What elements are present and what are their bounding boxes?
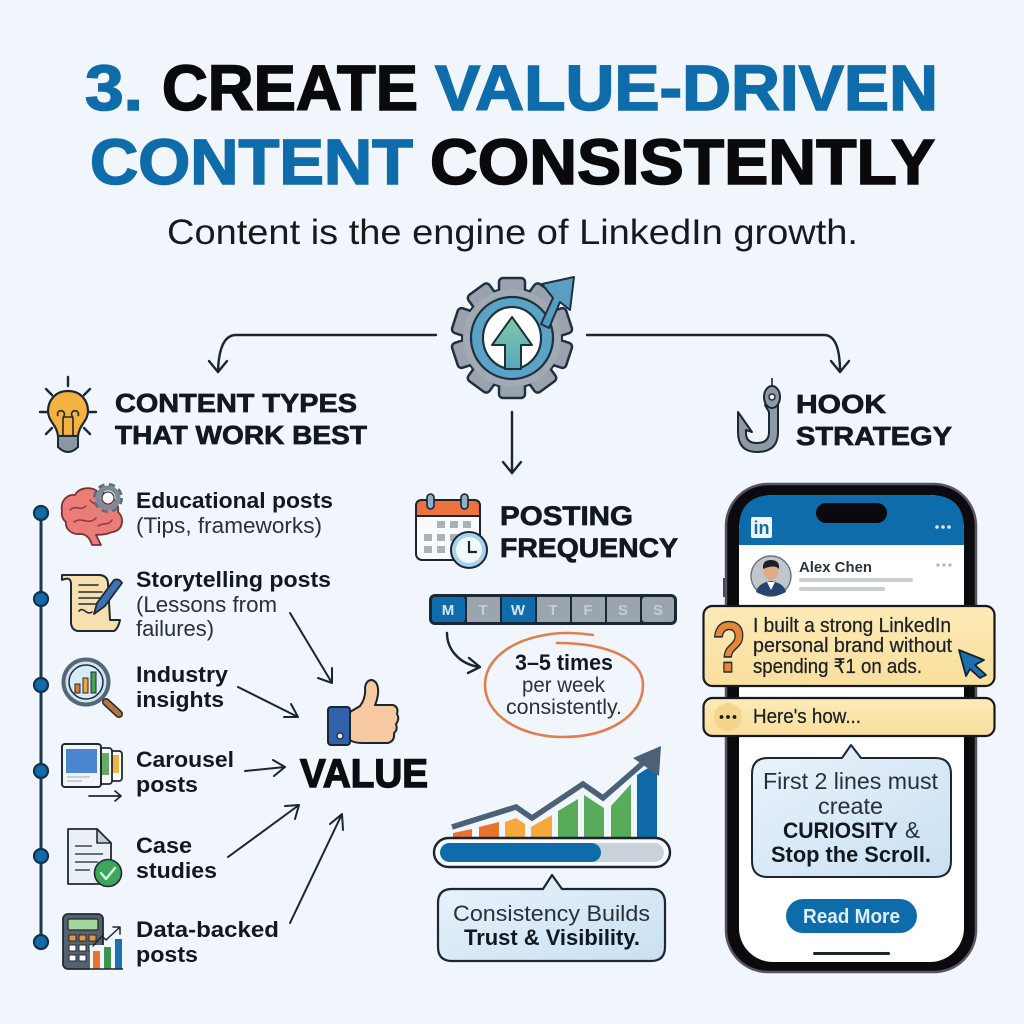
icon: document with check [68,829,122,886]
text: educational posts: (Tips, frameworks) [136,513,322,538]
heading: posting frequency: POSTING [500,501,633,531]
week bar: M [442,602,454,619]
post author: Alex Chen [799,559,872,576]
text: storytelling posts: Storytelling posts [136,567,331,592]
week bar: F [583,602,593,619]
callout: first 2 lines: First 2 lines must [763,768,939,794]
hook box: personal brand without [753,635,952,657]
here's how box: Here's how... [753,706,861,728]
heading: hook strategy [796,389,952,451]
icon: magnifier with chart [64,660,119,714]
arrow: to hook strategy [587,335,849,372]
panel: posting frequency [416,494,678,961]
icon: scroll and pen [62,575,122,631]
arrow: to content types [209,335,436,372]
icon: calendar and clock [416,494,487,568]
panel: content types [34,377,428,970]
text: carousel posts: Carousel [136,747,234,772]
text: industry insights [136,662,229,712]
week bar [429,594,677,625]
post author [751,556,952,596]
arrow: week to frequency [447,633,480,673]
hook box: spending ₹1 on ads. [753,656,922,678]
label: value: VALUE [300,752,428,796]
timeline [34,506,48,949]
week bar: S [618,602,628,619]
heading: content types: CONTENT TYPES [115,388,357,418]
callout: first 2 lines: CURIOSITY [783,818,898,843]
callout: 3-5 times: 3–5 times [515,650,613,675]
text: data-backed posts: Data-backed [136,917,279,942]
home indicator [813,952,890,955]
icon: calculator with chart [63,914,124,970]
icon: carousel cards [62,744,122,801]
subtitle: Content is the engine of LinkedIn growth. [167,213,858,252]
callout: 3-5 times [485,633,643,737]
heading: posting frequency: FREQUENCY [500,533,678,563]
callout: 3-5 times: per week [522,674,605,697]
phone header: in [754,518,770,538]
icon: light bulb [40,377,96,452]
text: carousel posts: posts [136,772,198,797]
title: CONSISTENTLY [430,126,935,198]
arrow: to posting frequency [503,412,521,473]
phone header [739,495,964,545]
panel: hook strategy [704,378,994,972]
arrows: types into value [228,613,343,923]
callout: consistency builds trust: Trust & Visibility. [464,925,640,950]
callout: first 2 lines [752,745,951,877]
text: carousel posts [136,747,234,797]
icon: fish hook [738,378,780,452]
week bar: T [478,602,488,619]
title: 3. [85,52,143,124]
progress bar [434,838,670,867]
hook box [704,606,994,688]
text: data-backed posts: posts [136,942,198,967]
callout: first 2 lines: create [818,793,883,819]
week bar: S [653,602,663,619]
week bar: W [511,602,526,619]
icon: gear with growth arrow [451,277,574,398]
callout: first 2 lines: & [905,817,920,843]
here's how box [704,698,994,736]
heading: hook strategy: HOOK [796,389,886,419]
title: VALUE-DRIVEN [435,52,938,124]
callout: consistency builds trust: Consistency Builds [453,901,650,926]
hook box: I built a strong LinkedIn [753,615,951,637]
text: storytelling posts: (Lessons from [136,592,277,617]
button: read more: Read More [803,906,900,928]
text: educational posts [136,488,333,538]
text: industry insights: insights [136,687,224,712]
title [85,52,938,198]
title: CREATE [162,52,418,124]
chart: growth bars [452,746,661,837]
heading: content types [115,388,367,450]
callout: consistency builds trust [438,875,665,961]
text: storytelling posts [136,567,331,641]
heading: content types: THAT WORK BEST [115,420,367,450]
icon: question mark: ? [712,608,746,688]
text: data-backed posts [136,917,279,967]
text: educational posts: Educational posts [136,488,333,513]
phone mockup [704,484,994,972]
button: read more [786,899,917,933]
text: storytelling posts: failures) [136,616,214,641]
title: CONTENT [90,126,413,198]
icon: thumbs up [328,680,398,745]
text: case studies: studies [136,858,217,883]
heading: hook strategy: STRATEGY [796,421,952,451]
heading: posting frequency [500,501,678,563]
text: case studies [136,833,217,883]
text: case studies: Case [136,833,192,858]
callout: 3-5 times: consistently. [506,696,622,719]
icon: brain and gear [62,486,122,545]
text: industry insights: Industry [136,662,229,687]
week bar: T [548,602,558,619]
callout: first 2 lines: Stop the Scroll. [771,842,931,867]
